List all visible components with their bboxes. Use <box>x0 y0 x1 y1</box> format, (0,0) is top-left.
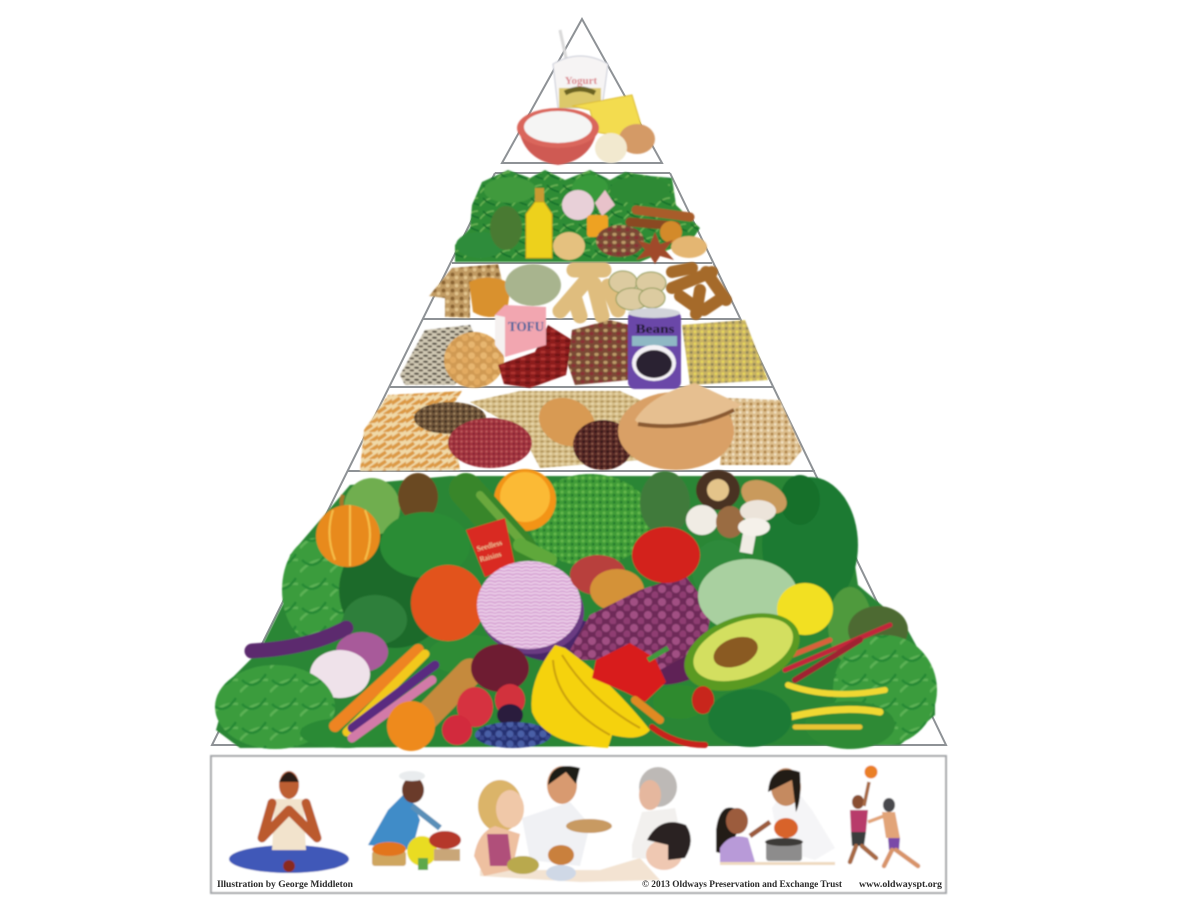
onion <box>310 632 388 698</box>
cucumber <box>466 490 550 560</box>
chard and right greens <box>805 587 937 749</box>
figure: girl and father cooking <box>716 768 835 865</box>
red cabbage <box>477 561 584 654</box>
penne pasta <box>360 391 462 471</box>
cheese <box>572 95 642 138</box>
bananas <box>531 645 650 748</box>
mixed beans <box>568 320 630 385</box>
tofu box: TOFU <box>508 320 544 335</box>
pumpkin <box>316 495 380 567</box>
herbs <box>455 170 700 262</box>
credit: copyright: © 2013 Oldways Preservation and Exchange Trust <box>642 879 843 890</box>
grapes <box>570 575 712 670</box>
dark grain <box>414 402 486 434</box>
peanuts <box>560 270 618 316</box>
chard stems <box>780 625 890 727</box>
honey jar <box>587 215 608 237</box>
red pepper <box>592 643 668 702</box>
raisin box <box>466 518 515 577</box>
figure: yoga <box>229 771 349 873</box>
tier: oils, herbs and spices <box>455 170 707 264</box>
leafy greens backdrop <box>282 471 858 685</box>
green backdrop <box>216 476 935 748</box>
yellow bean mix <box>682 320 768 385</box>
tier: legumes <box>400 305 768 389</box>
panel frame <box>211 756 946 893</box>
credit: website: www.oldwayspt.org <box>859 880 942 890</box>
woman <box>474 780 524 876</box>
cinnamon sticks <box>630 210 690 243</box>
boy <box>646 822 691 870</box>
bowl of cottage cheese <box>517 108 599 165</box>
apple <box>632 527 700 583</box>
pistachios <box>609 271 666 310</box>
nut grains <box>720 398 802 465</box>
spinach <box>708 689 792 747</box>
grandmother <box>632 767 680 860</box>
salad bowl <box>507 856 539 874</box>
soup bowl <box>546 865 576 881</box>
nut butter jar <box>469 277 511 317</box>
grain band <box>470 391 640 468</box>
pecans <box>672 268 726 314</box>
nut pod <box>671 236 707 258</box>
figure: children playing ball <box>850 766 918 866</box>
green bottle <box>490 206 522 250</box>
star anise <box>636 232 674 264</box>
pyramid outline <box>212 19 946 745</box>
dark green cabbage <box>339 512 470 648</box>
activity panel <box>211 756 946 893</box>
figure: farmer at market <box>368 771 461 870</box>
tomato <box>411 565 485 641</box>
mushrooms <box>686 470 792 553</box>
striped seeds <box>400 325 480 385</box>
olives <box>398 473 438 521</box>
raisin box: Raisins <box>479 549 502 564</box>
oil bottle <box>526 188 552 258</box>
garlic <box>562 190 615 220</box>
spice mix <box>596 225 644 257</box>
raisin box: Seedless <box>476 538 503 553</box>
credit: illustrator: Illustration by George Middleton <box>217 880 354 890</box>
eggplant <box>252 628 346 651</box>
ginger <box>553 232 585 260</box>
cherries <box>471 644 529 692</box>
bread loaf <box>548 845 574 865</box>
man <box>522 766 612 866</box>
raisin pile <box>573 420 633 470</box>
can of beans: Beans <box>636 321 674 336</box>
yogurt carton: Yogurt <box>565 75 598 87</box>
walnuts <box>429 264 502 318</box>
red grain <box>448 418 532 468</box>
small peppers and chili <box>635 685 714 745</box>
berries <box>442 684 551 748</box>
tier: fruits and vegetables <box>215 469 937 751</box>
carrots <box>335 650 435 738</box>
table <box>480 858 660 882</box>
bread roll <box>531 389 603 455</box>
avocado <box>674 599 810 705</box>
kidney beans <box>498 325 572 388</box>
can of beans <box>628 308 681 389</box>
tofu box <box>495 305 546 357</box>
chickpeas <box>444 332 504 388</box>
left lettuce <box>215 665 390 749</box>
tier: whole grains <box>360 383 802 471</box>
pale cabbage <box>698 559 798 633</box>
orange half <box>494 469 556 531</box>
red apple and potato <box>570 555 644 611</box>
tier: nuts and seeds <box>429 264 726 318</box>
tier: dairy and eggs <box>517 30 655 165</box>
sweet potato <box>387 672 470 751</box>
pita bread <box>618 383 742 470</box>
pumpkin seeds <box>505 264 561 306</box>
eggs <box>595 124 655 163</box>
lemon <box>777 583 833 635</box>
figure: family dinner table <box>474 766 691 882</box>
